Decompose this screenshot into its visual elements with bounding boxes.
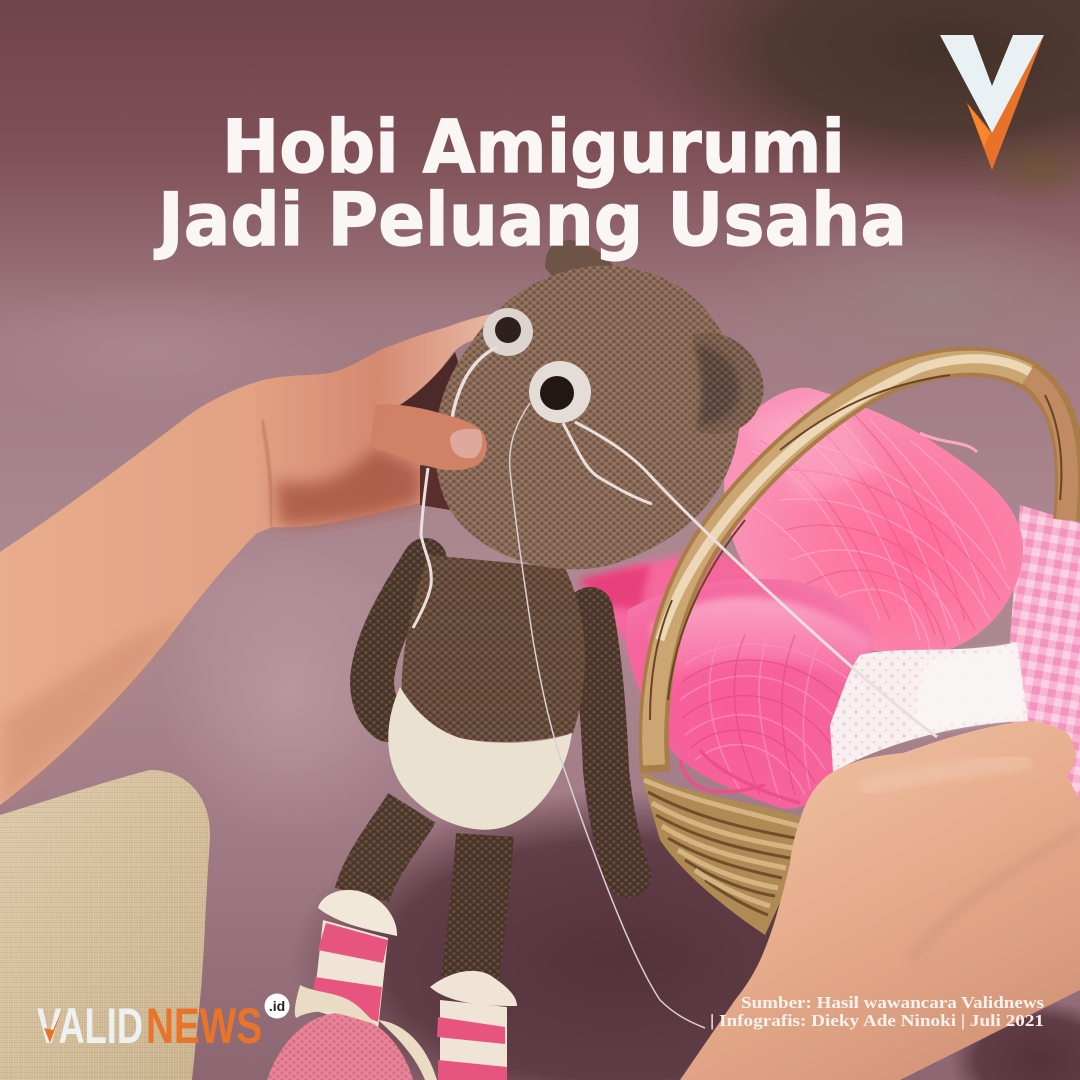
photo: left hand and arm, behind toy — [0, 312, 500, 805]
toy left sock — [313, 890, 397, 1030]
title: Hobi Amigurumi — [222, 105, 845, 190]
source credit: Sumber: Hasil wawancara Validnews — [741, 993, 1045, 1012]
small yarn ball — [626, 579, 873, 809]
toy lower eye — [529, 361, 591, 423]
toy torso — [402, 555, 585, 742]
photo: basket handle — [650, 359, 1070, 772]
toy right ear — [692, 333, 764, 434]
photo: thread from eyes — [413, 347, 937, 1028]
toy white belly — [388, 687, 572, 830]
photo: pink checked cloth — [1010, 505, 1080, 800]
toy right arm — [590, 610, 628, 875]
photo: pink yarn balls — [578, 388, 1023, 809]
toy right leg — [470, 835, 485, 980]
toy top ear — [545, 240, 615, 285]
photo: left hand index finger, over toy — [370, 404, 487, 470]
title: Jadi Peluang Usaha — [153, 178, 907, 263]
logo: V mark top right — [940, 35, 1044, 170]
photo: right hand and arm — [680, 721, 1080, 1080]
title — [153, 105, 907, 263]
photo: amigurumi toy — [267, 240, 764, 1080]
logo: .id badge: .id — [269, 998, 285, 1014]
toy right sock — [430, 971, 517, 1080]
big yarn ball — [724, 388, 1023, 654]
logo: orange V accent — [44, 1010, 62, 1043]
photo: lace cloth — [830, 642, 1028, 772]
toy upper eye — [483, 308, 533, 356]
source credit: | Infografis: Dieky Ade Ninoki | Juli 2021 — [710, 1011, 1044, 1030]
toy left arm — [372, 560, 425, 720]
toy head — [435, 266, 740, 569]
logo: .id badge — [264, 994, 290, 1018]
toy left leg — [362, 808, 412, 895]
photo: wicker basket body — [640, 770, 800, 935]
logo: Validnews wordmark: NEWS — [146, 998, 262, 1054]
photo: cream burlap pillow — [0, 770, 210, 1080]
logo: Validnews wordmark — [37, 998, 262, 1054]
toy pink ball and ribbon — [267, 985, 437, 1080]
source credit — [710, 993, 1045, 1030]
logo: Validnews wordmark: VALID — [37, 998, 143, 1054]
